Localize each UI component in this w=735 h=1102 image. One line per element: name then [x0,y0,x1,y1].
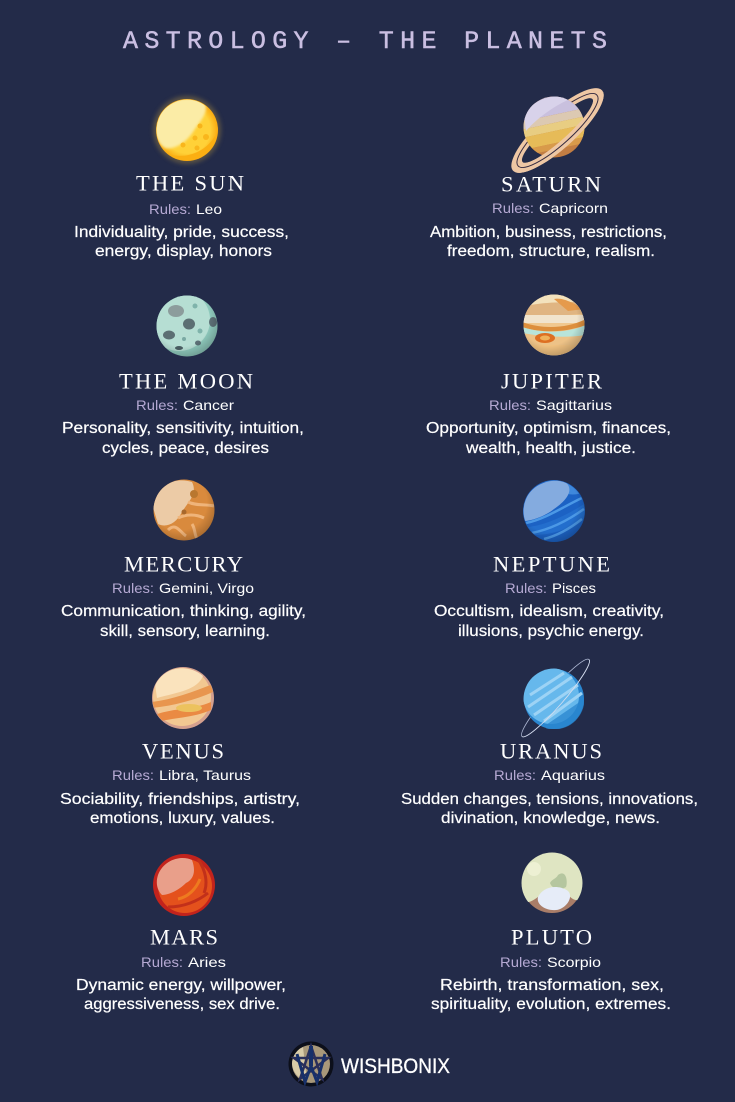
description: skill, sensory, learning. [100,623,270,640]
rules: Rules: [112,580,154,596]
rules: Sagittarius [536,397,612,413]
description [434,603,664,640]
rules [149,201,222,217]
rules: Rules: [141,954,183,970]
rules: Pisces [552,580,596,596]
description: Opportunity, optimism, finances, [426,420,671,437]
description: Occultism, idealism, creativity, [434,603,664,620]
description: spirituality, evolution, extremes. [431,996,671,1013]
panel: uranus [401,654,698,827]
rules [492,200,608,216]
panel: venus [60,667,300,827]
icon: pluto [518,851,584,913]
heading: THE MOON [119,368,253,394]
description: energy, display, honors [95,243,272,260]
heading: VENUS [142,738,224,764]
icon: jupiter [522,293,586,357]
description: Sudden changes, tensions, innovations, [401,791,698,808]
rules: Capricorn [539,200,608,216]
title: ASTROLOGY – THE PLANETS [123,27,607,56]
rules: Leo [196,201,222,217]
wordmark: WISHBONIX [341,1055,450,1078]
description: wealth, health, justice. [465,440,636,457]
heading: URANUS [500,738,602,764]
panel: saturn [430,77,667,260]
heading: NEPTUNE [493,552,610,576]
icon: mercury [152,480,214,540]
description: Personality, sensitivity, intuition, [62,420,304,437]
panel: the moon [62,289,304,457]
heading: MERCURY [124,552,243,576]
description [61,603,306,640]
description [62,420,304,457]
rules: Aries [188,954,226,970]
description [401,791,698,827]
heading: JUPITER [501,368,602,394]
rules: Gemini, Virgo [159,580,254,596]
panel: mars [76,854,286,1013]
description: aggressiveness, sex drive. [84,996,280,1013]
description: illusions, psychic energy. [458,623,644,640]
rules: Aquarius [541,767,605,783]
icon: pentacle emblem [288,1042,334,1086]
icon: venus [151,667,214,729]
logo: wishbonix [288,1042,450,1086]
rules [112,767,251,783]
rules [112,580,254,596]
heading: MARS [150,924,218,950]
description: Sociability, friendships, artistry, [60,791,300,808]
description [426,420,671,457]
description: cycles, peace, desires [102,440,269,457]
heading: SATURN [501,172,601,196]
description: emotions, luxury, values. [90,810,275,827]
description [60,791,300,827]
rules [494,767,605,783]
description: Rebirth, transformation, sex, [440,977,664,994]
description: freedom, structure, realism. [447,243,655,260]
rules: Rules: [112,767,154,783]
icon: mars [153,854,215,916]
description: Individuality, pride, success, [74,224,289,241]
panel: pluto [431,851,671,1013]
rules: Rules: [136,397,178,413]
description: divination, knowledge, news. [441,810,660,827]
rules [500,954,601,970]
icon: sun [153,96,221,164]
description: Ambition, business, restrictions, [430,224,667,241]
rules: Rules: [505,580,547,596]
rules [136,397,234,413]
description: Communication, thinking, agility, [61,603,306,620]
panel: mercury [61,480,306,640]
rules [141,954,226,970]
icon: uranus with ring [521,658,590,738]
rules: Rules: [492,200,534,216]
icon: neptune [522,480,586,542]
rules: Scorpio [547,954,601,970]
heading: PLUTO [511,924,592,950]
heading: THE SUN [136,170,244,196]
rules: Rules: [500,954,542,970]
panel: neptune [434,480,664,640]
panel: the sun [74,96,289,260]
rules [505,580,596,596]
description [76,977,286,1013]
icon: moon [156,296,218,356]
description [74,224,289,260]
icon: saturn with rings [511,88,604,173]
rules: Rules: [149,201,191,217]
rules: Rules: [489,397,531,413]
rules: Libra, Taurus [159,767,251,783]
rules: Cancer [183,397,234,413]
panel: jupiter [426,293,671,457]
description [431,977,671,1013]
rules: Rules: [494,767,536,783]
description: Dynamic energy, willpower, [76,977,286,994]
description [430,224,667,260]
rules [489,397,612,413]
